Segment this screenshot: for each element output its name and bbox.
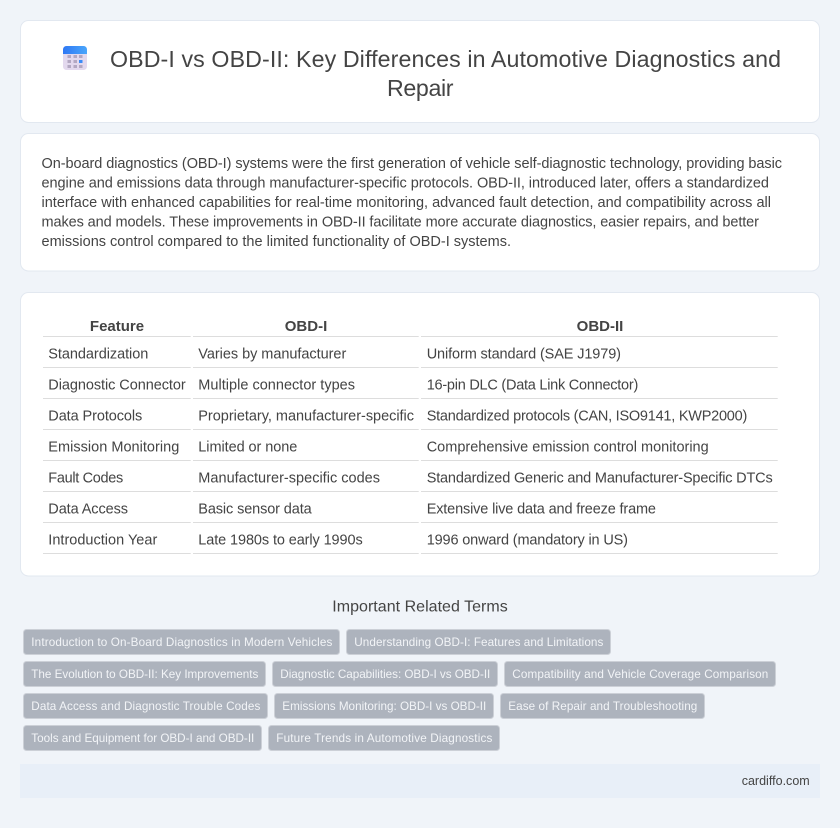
text block: introduction paragraph: engine and emissions data through manufacturer-specific protocols. OBD-II, introduced later, offers a standardized: [42, 176, 769, 192]
panel: introduction: [20, 134, 820, 271]
tag: diagnostic capabilities: Diagnostic Capabilities: OBD-I vs OBD-II: [280, 668, 490, 681]
heading: important related terms: Important Related Terms: [332, 599, 508, 616]
table row: Diagnostic Connector: Multiple connector types: [198, 377, 355, 393]
tag: data access: Data Access and Diagnostic Trouble Codes: [31, 700, 260, 713]
footer: cardiffo.com: [742, 774, 810, 788]
table row: Standardization: Varies by manufacturer: [198, 346, 346, 362]
tag: ease of repair: Ease of Repair and Troubleshooting: [508, 700, 697, 713]
table row: Fault Codes: Manufacturer-specific codes: [198, 470, 380, 486]
table row: Data Access: [43, 501, 778, 522]
table row: Data Access: Extensive live data and freeze frame: [427, 501, 656, 517]
tag: introduction: Introduction to On-Board Diagnostics in Modern Vehicles: [31, 636, 332, 649]
panel: related terms tags: [24, 630, 776, 750]
table row: Introduction Year: 1996 onward (mandatory in US): [427, 532, 628, 548]
table row: Standardization: Standardization: [48, 346, 148, 362]
table row: Standardization: Uniform standard (SAE J1979): [427, 346, 621, 362]
table row: Fault Codes: Standardized Generic and Manufacturer-Specific DTCs: [427, 470, 773, 486]
tag: diagnostic capabilities: [272, 662, 498, 686]
tag: compatibility: [504, 662, 776, 686]
table row: Data Access: Data Access: [48, 501, 128, 517]
title: [110, 46, 781, 101]
table row: Fault Codes: [43, 470, 778, 492]
tag: data access: [24, 694, 268, 718]
footer: [20, 764, 820, 798]
table row: Data Protocols: Proprietary, manufacturer-specific: [198, 408, 414, 424]
tag: tools: Tools and Equipment for OBD-I and OBD-II: [31, 732, 254, 745]
table row: Data Protocols: [43, 408, 778, 430]
table row: Introduction Year: Introduction Year: [48, 532, 157, 548]
tag: emissions monitoring: Emissions Monitoring: OBD-I vs OBD-II: [282, 700, 486, 713]
text block: introduction paragraph: emissions control compared to the limited functionality of OBD-I systems.: [42, 234, 511, 250]
text block: introduction paragraph: makes and models. These improvements in OBD-II facilitate more accurate diagnostics, easier repairs, and better: [42, 214, 759, 230]
table row: Standardization: [43, 346, 778, 368]
table row: Emission Monitoring: [43, 439, 778, 460]
table row: Emission Monitoring: Emission Monitoring: [48, 439, 179, 455]
table row: Introduction Year: Late 1980s to early 1990s: [198, 532, 363, 548]
tag: future trends: [268, 726, 500, 750]
tag: tools: [24, 726, 262, 750]
title: OBD-I vs OBD-II: Key Differences in Automotive Diagnostics and: [110, 46, 781, 72]
icon: calendar: [63, 46, 87, 70]
table row: Introduction Year: [43, 532, 778, 554]
tag: evolution: The Evolution to OBD-II: Key Improvements: [31, 668, 258, 681]
tag: emissions monitoring: [274, 694, 494, 718]
panel: header: [20, 20, 820, 122]
tag: future trends: Future Trends in Automotive Diagnostics: [276, 732, 492, 745]
table header row: OBD-I: [285, 318, 327, 335]
table row: Diagnostic Connector: 16-pin DLC (Data Link Connector): [427, 377, 638, 393]
title: Repair: [387, 75, 454, 101]
tag: understanding OBD-I: Understanding OBD-I: Features and Limitations: [354, 636, 603, 649]
table row: Data Access: Basic sensor data: [198, 501, 313, 517]
table row: Data Protocols: Standardized protocols (CAN, ISO9141, KWP2000): [427, 408, 747, 424]
table header row: Feature: [90, 318, 144, 335]
text block: introduction paragraph: interface with enhanced capabilities for real-time monitoring, advanced fault detection, and compatibility across all: [42, 195, 771, 211]
tag: introduction: [24, 630, 340, 654]
table header row: OBD-II: [577, 318, 623, 335]
text block: introduction paragraph: [42, 156, 782, 250]
table row: Emission Monitoring: Comprehensive emission control monitoring: [427, 439, 709, 455]
panel: comparison table: [20, 292, 820, 576]
text block: introduction paragraph: On-board diagnostics (OBD-I) systems were the first generation of vehicle self-diagnostic technology, providing basic: [42, 156, 782, 172]
table row: Diagnostic Connector: [43, 377, 778, 398]
tag: understanding OBD-I: [346, 630, 610, 654]
table row: Emission Monitoring: Limited or none: [198, 439, 297, 455]
tag: compatibility: Compatibility and Vehicle Coverage Comparison: [512, 668, 768, 681]
table row: Data Protocols: Data Protocols: [48, 408, 142, 424]
table row: Fault Codes: Fault Codes: [48, 470, 123, 486]
table header row: [43, 318, 778, 336]
tag: evolution: [24, 662, 266, 686]
table row: Diagnostic Connector: Diagnostic Connector: [48, 377, 186, 393]
tag: ease of repair: [500, 694, 704, 718]
